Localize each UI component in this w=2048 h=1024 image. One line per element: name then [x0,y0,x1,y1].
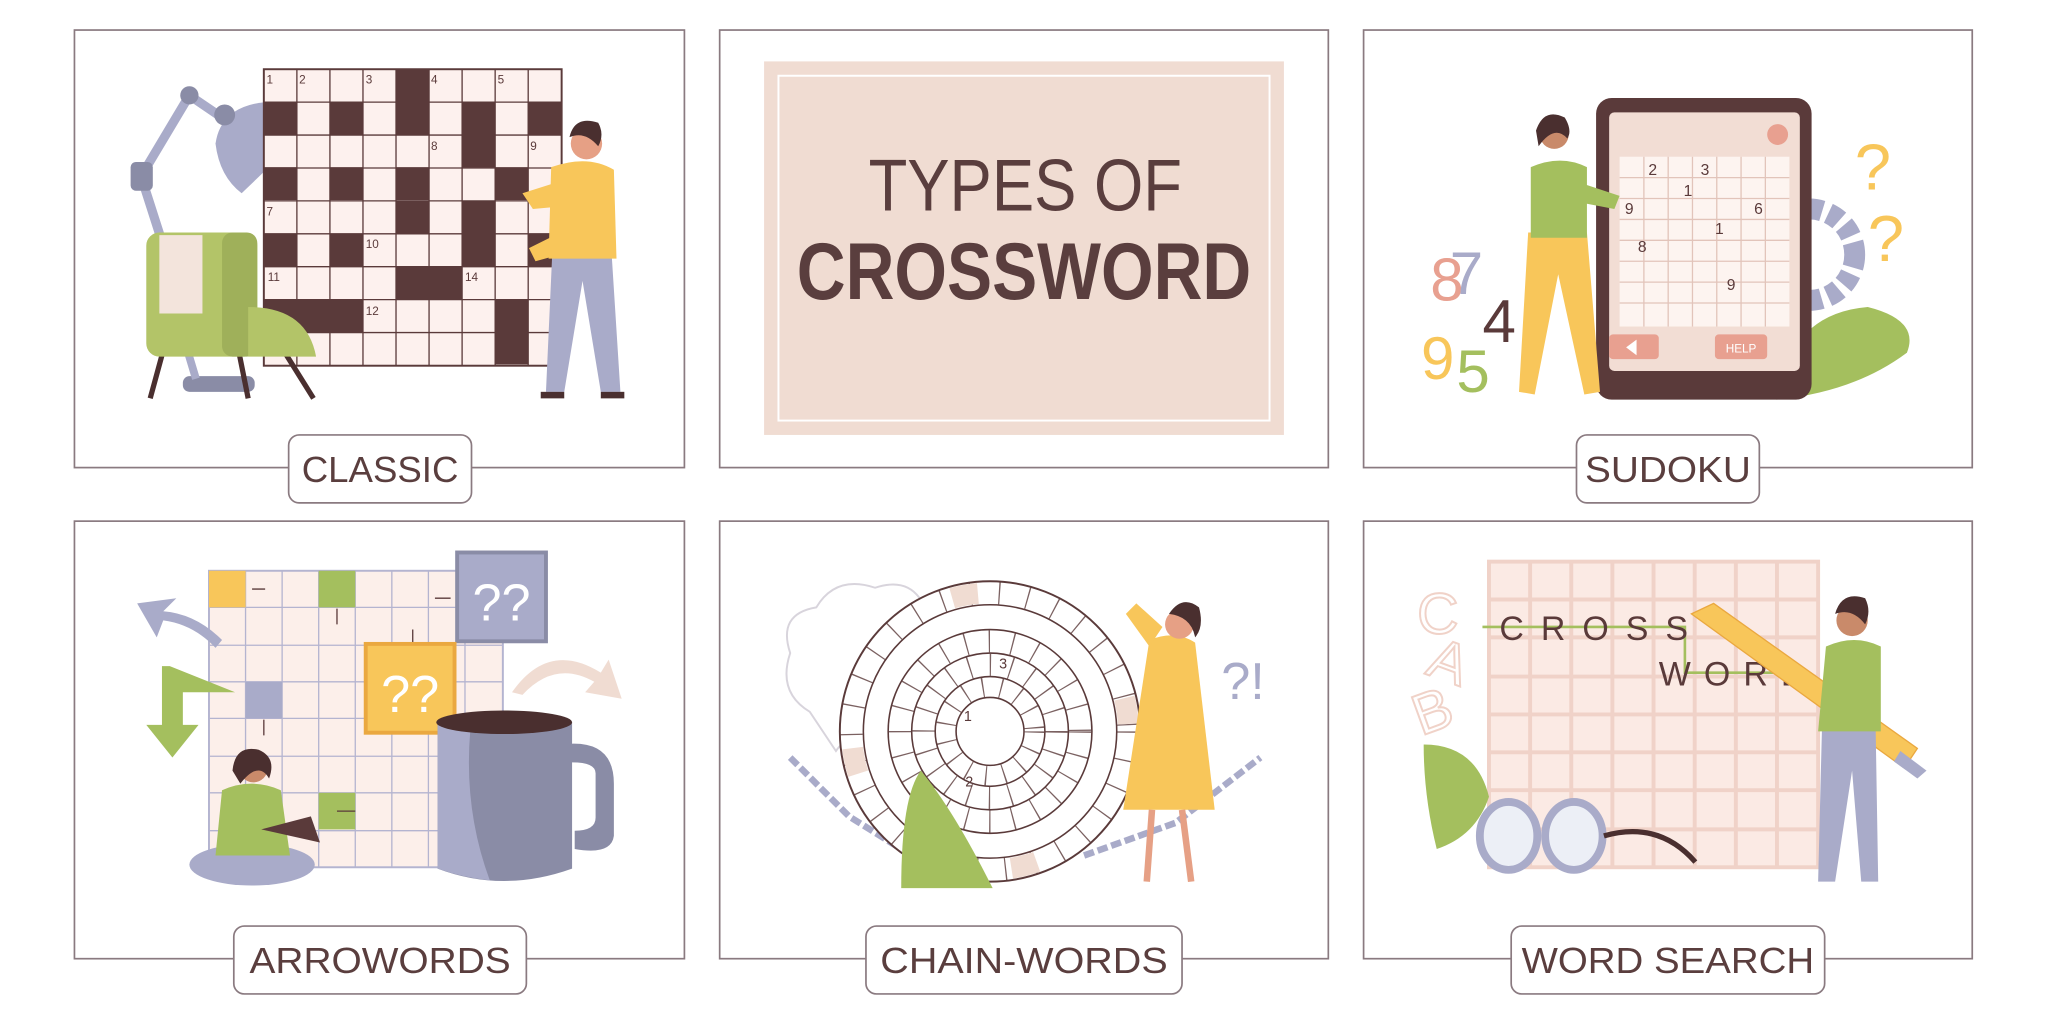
phone with sudoku grid: 6 [1754,201,1763,218]
icon: chains [790,758,1260,856]
icon: desk lamp [131,86,311,392]
icon: numbers: 9 [1421,325,1454,392]
icon: leaves [901,771,993,888]
person: sitting woman [189,749,320,886]
icon: leaves [1424,744,1489,849]
icon: question marks: ? [1855,130,1891,203]
classic crossword grid [264,69,562,366]
label: arrowords: ARROWORDS [249,940,511,981]
classic crossword grid: 8 [431,140,438,153]
title text: TYPES OF [869,145,1182,226]
title text [797,145,1251,317]
icon: question marks: ? [1868,202,1904,275]
label: arrowords [234,926,526,994]
icon: numbers: 8 [1430,246,1464,313]
label: sudoku: SUDOKU [1585,449,1751,490]
word search grid: CROSS [1499,610,1705,648]
icon: question exclamation: ?! [1221,653,1265,711]
label: word search [1511,926,1825,994]
phone with sudoku grid [1596,98,1812,400]
icon: numbers: 7 [1450,240,1483,307]
classic crossword grid: 9 [530,140,537,153]
icon: pencil [1691,603,1927,778]
classic crossword grid: 10 [366,238,379,251]
label: chain-words: CHAIN-WORDS [880,940,1168,981]
icon: glasses [1480,802,1695,870]
phone with sudoku grid: 1 [1715,221,1724,238]
icon: thought cloud [786,584,927,751]
panel: arrowords [74,521,684,994]
panel: chain-words [720,521,1328,994]
panel: title [720,30,1328,468]
person: woman [1519,114,1620,394]
icon: letters CAB [1404,582,1478,748]
label: chain-words [866,926,1182,994]
icon: letters CAB: C [1417,582,1459,646]
icon: letters CAB: A [1420,626,1478,699]
phone with sudoku grid: 1 [1684,183,1692,200]
icon: mug [436,711,614,881]
classic crossword grid: 12 [366,305,379,318]
label: sudoku [1576,435,1759,503]
panel: classic [74,30,684,503]
icon: leaves [1776,307,1910,400]
phone with sudoku grid: 9 [1727,277,1735,294]
phone with sudoku grid: 9 [1625,201,1634,218]
person: man with pencil [1818,596,1881,882]
word search grid [1482,562,1818,867]
person: thinking woman [1123,602,1215,882]
phone with sudoku grid: 2 [1648,162,1657,179]
icon: gear [1763,209,1855,300]
icon: question boxes [366,552,546,733]
icon: numbers: 5 [1456,338,1490,405]
classic crossword grid: 2 [299,74,306,87]
phone with sudoku grid: HELP [1726,343,1757,356]
icon: question boxes: ?? [381,666,439,724]
classic crossword grid: 11 [268,271,280,284]
label: classic: CLASSIC [302,449,458,490]
chain spiral: 2 [965,774,973,790]
chain spiral: 1 [964,709,972,725]
icon: question boxes: ?? [472,574,531,632]
panel: word search [1364,521,1972,994]
arrowords grid [209,571,503,867]
panel: sudoku [1364,30,1972,503]
title text: CROSSWORD [797,227,1251,317]
icon: numbers: 4 [1482,288,1516,355]
classic crossword grid: 7 [266,206,273,219]
icon: arrows [137,598,622,758]
icon: letters CAB: B [1404,675,1461,748]
classic crossword grid: 5 [498,74,505,87]
chain spiral [840,581,1140,882]
classic crossword grid: 4 [431,74,438,87]
label: word search: WORD SEARCH [1522,940,1814,981]
label: classic [289,435,472,503]
classic crossword grid: 14 [465,271,479,284]
phone with sudoku grid: 3 [1701,162,1710,179]
person: man [522,121,624,398]
phone with sudoku grid: 8 [1638,239,1647,256]
icon: numbers [1421,240,1516,405]
word search grid: WORD [1659,656,1818,694]
icon: armchair [146,232,316,398]
classic crossword grid: 1 [266,74,273,87]
chain spiral: 3 [999,657,1007,673]
icon: question marks [1855,130,1904,275]
classic crossword grid: 3 [366,74,373,87]
